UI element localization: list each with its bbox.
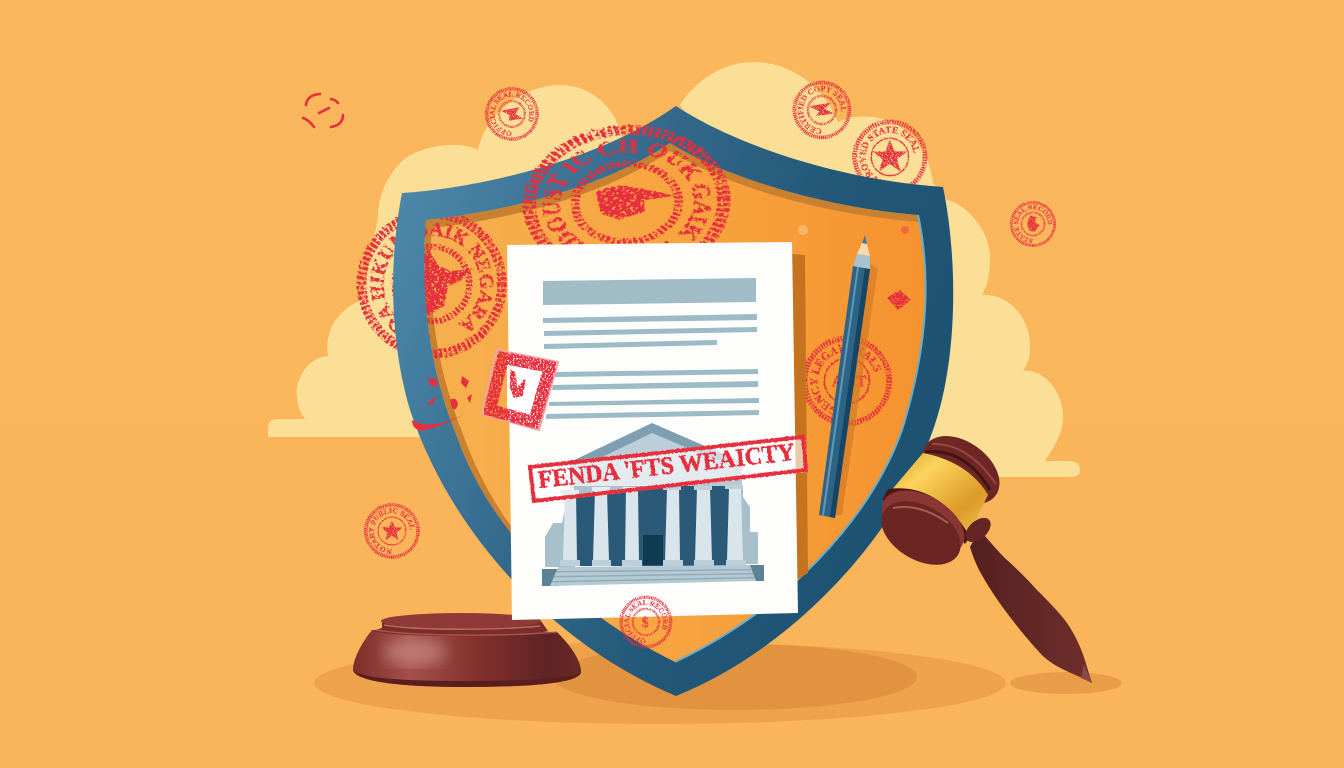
face	[870, 488, 972, 578]
door	[643, 535, 663, 565]
gavel sound block	[353, 613, 581, 687]
stamp: right of document: AGENCY LEGAL SEALS	[810, 344, 882, 415]
stamp: faint top right of field	[901, 226, 909, 234]
collar	[961, 513, 995, 547]
stamp: faint near document	[798, 225, 808, 235]
right cloud	[680, 62, 1080, 477]
shield rim	[393, 106, 953, 696]
near rim	[871, 477, 975, 569]
shield field	[430, 151, 930, 668]
stamp: bottom of document: OFFICIAL SEAL RECORD	[624, 600, 668, 644]
gavel	[870, 422, 1092, 683]
ground shadow	[314, 642, 1006, 724]
stamp: square seal on document edge	[482, 350, 558, 430]
side wings	[545, 503, 575, 567]
left cloud	[268, 85, 680, 437]
dark groove	[882, 488, 970, 544]
plinths	[542, 569, 558, 586]
gavel shadow	[1010, 672, 1122, 694]
stamp fragment: top left marks	[303, 94, 343, 127]
rim highlight	[675, 215, 926, 662]
heading bar	[543, 278, 756, 305]
gold band	[890, 453, 988, 535]
stamp: left, partly under shield rim: UNDA HIKUM BAIK NEGARA	[370, 222, 494, 339]
stamp: bottom of document: $	[642, 615, 649, 631]
columns	[563, 488, 743, 561]
stamp: large top over rim: UNDOUST IC CH OUK GAIK WUIT	[542, 139, 712, 244]
handle	[970, 533, 1092, 683]
far end	[910, 422, 1012, 518]
stamp: right of document: AGT	[832, 374, 867, 391]
stamp: star behind shield edge: APPROVED STATE SEAL	[859, 126, 920, 181]
stamp: far right small: STATE SEAL RECORD	[1014, 204, 1052, 244]
stamp: top right: CERTIFIED COPY SEAL	[798, 86, 846, 134]
building illustration	[542, 423, 764, 586]
stamp: large top over rim	[522, 124, 732, 245]
shield field shadow	[424, 143, 926, 662]
document shadow	[792, 254, 808, 580]
stamp: small top left cloud: OFFICIAL SEAL RECORD	[489, 91, 534, 136]
text lines	[543, 314, 759, 419]
stamp: lower left star: NOTARY PUBLIC SEAL	[368, 508, 415, 554]
interior	[574, 486, 732, 566]
pencil	[819, 235, 870, 518]
entablature	[570, 460, 742, 488]
pediment	[568, 423, 744, 463]
stamp: small near pencil	[887, 290, 911, 310]
stamp: banner across building: FENDA 'FTS WEAICTY	[537, 439, 796, 494]
steps	[550, 565, 756, 586]
document	[507, 242, 798, 620]
pencil shadow	[834, 262, 878, 515]
stamp fragments: lower left on shield	[412, 376, 472, 431]
